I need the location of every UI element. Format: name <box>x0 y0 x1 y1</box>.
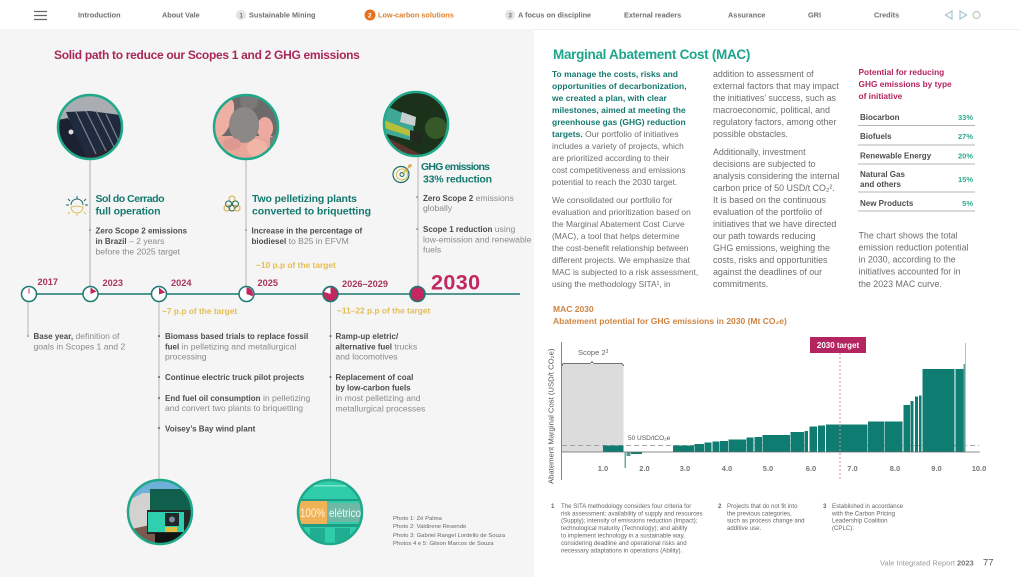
footnote 3: 3 <box>823 503 827 510</box>
milestone: GHG emissions 33% reduction: fuels <box>423 244 441 254</box>
navigation bar: 2 <box>368 12 372 20</box>
timeline <box>22 270 520 302</box>
x axis labels: 5.0 <box>763 464 773 473</box>
navigation bar: About Vale <box>162 10 200 20</box>
text column 2: addition to assessment of <box>713 69 814 79</box>
footnote 3: with the Carbon Pricing <box>831 510 895 518</box>
text column 1: potential to reach the 2030 target. <box>552 177 677 187</box>
timeline: 2017 <box>38 277 58 287</box>
photo: 100% electric sign: elétrico <box>329 506 361 520</box>
text column 1: To manage the costs, risks and <box>552 69 678 79</box>
text column 1: MAC is subjected to a risk assessment, <box>552 267 698 277</box>
photo: solar panels <box>59 96 121 158</box>
marker: 2017 <box>22 286 36 302</box>
text column 1: We consolidated our portfolio for <box>552 195 673 205</box>
dashed 50 USD line <box>562 444 979 446</box>
y axis title: Abatement Marginal Cost (USD/t CO₂e) <box>546 348 556 484</box>
footnote 3: Leadership Coalition <box>832 518 888 524</box>
text column 1: different projects. We emphasize that <box>552 255 691 265</box>
milestone: 2026-2029 actions: metallurgical processes <box>336 404 425 414</box>
text column 2: our path towards reducing <box>713 231 816 241</box>
icon: pellets triangle <box>224 196 240 211</box>
milestone: GHG emissions 33% reduction <box>416 161 532 254</box>
panel: potential by initiative: 33% <box>958 113 973 122</box>
text column 2: the initiatives’ success, such as <box>713 93 837 103</box>
milestone: Sol do Cerrado: in Brazil – 2 years <box>96 236 164 246</box>
text column 2 <box>713 69 839 289</box>
milestone: GHG emissions 33% reduction: Scope 1 reduction using <box>423 224 516 234</box>
timeline: 2023 <box>102 278 123 288</box>
footnote 1: to implement technology in a sustainable way, <box>561 532 685 540</box>
timeline: 2024 <box>171 278 192 288</box>
panel: potential by initiative: Biofuels <box>860 132 892 141</box>
photo credits: Photo 2: Valdirene Resende <box>393 524 467 530</box>
x axis labels: 2.0 <box>639 464 650 473</box>
teal bars <box>603 364 965 468</box>
footnote 2: such as process change and <box>727 518 805 524</box>
navigation bar <box>34 10 980 20</box>
text column 1: (MAC), a tool that helps determine <box>552 231 680 241</box>
milestone: base year <box>27 331 125 352</box>
chart title: Abatement potential for GHG emissions in 2030 (Mt CO₂e) <box>553 316 787 326</box>
2030 target line <box>839 353 841 480</box>
text column 1: milestones, aimed at meeting the <box>552 105 686 115</box>
navigation bar: 3 <box>508 14 512 20</box>
milestone: pelletizing plants: Two pelletizing plants <box>252 193 357 205</box>
timeline: 2030 <box>431 270 480 294</box>
panel: potential by initiative: 27% <box>958 132 973 141</box>
milestone: 2026-2029 actions: by low-carbon fuels <box>336 384 411 392</box>
2030 target label <box>810 337 866 353</box>
text: chart note: in 2030, according to the <box>858 254 956 264</box>
milestone: GHG emissions 33% reduction: globally <box>423 203 453 213</box>
milestone: GHG emissions 33% reduction: 33% reduction <box>423 174 492 186</box>
timeline: 2026–2029 <box>342 279 388 289</box>
x axis labels: 7.0 <box>847 464 858 473</box>
left page background <box>0 29 534 577</box>
x axis labels: 6.0 <box>806 464 816 473</box>
panel: potential by initiative: 20% <box>958 152 973 160</box>
text column 1: the Marginal Abatement Cost Curve <box>552 219 685 229</box>
connector lines <box>28 155 418 480</box>
milestone: 2026-2029 actions: Replacement of coal <box>336 373 413 382</box>
milestone: 2024 actions: processing <box>165 352 207 362</box>
photo: pellets in hand <box>215 96 277 158</box>
chart: MAC curve <box>546 337 986 484</box>
text column 1: evaluation and prioritization based on <box>552 207 691 217</box>
milestone: Sol do Cerrado: full operation <box>96 206 160 218</box>
milestone: GHG emissions 33% reduction: GHG emissions <box>421 161 490 173</box>
milestone: pelletizing plants: biodiesel to B25 in EFVM <box>252 236 349 246</box>
target note: 7 p.p: ~7 p.p of the target <box>162 306 237 316</box>
footnote 2 <box>718 503 805 532</box>
milestone: 2026-2029 actions <box>330 332 425 414</box>
panel: potential by initiative <box>858 67 975 211</box>
text column 2: commitments. <box>713 279 768 289</box>
title: solid path: Solid path to reduce our Scopes 1 and 2 GHG emissions <box>54 48 360 62</box>
text column 1: we created a plan, with clear <box>551 93 667 103</box>
text column 2: GHG emissions, weighing the <box>713 243 830 253</box>
footnote 2: additive use. <box>727 525 762 532</box>
photo: 100% electric sign: 100% <box>300 506 325 520</box>
footnote 1: risk assessment: availability of supply and resources <box>561 510 703 518</box>
text column 1: are prioritized according to their <box>552 153 670 163</box>
text: chart note: initiatives accounted for in <box>858 266 961 276</box>
timeline: 2025 <box>258 278 278 288</box>
footnote 1: 1 <box>551 503 555 510</box>
milestone: pelletizing plants: Increase in the percentage of <box>252 226 363 236</box>
icon: target <box>393 164 412 182</box>
panel: potential by initiative: Natural Gas <box>860 170 905 179</box>
icon: previous and next arrows <box>946 11 966 19</box>
text column 2: It is based on the continuous <box>713 195 827 205</box>
text column 1: greenhouse gas (GHG) reduction <box>552 117 686 127</box>
milestone: 2026-2029 actions: in most pelletizing and <box>336 393 421 403</box>
panel: potential by initiative: Potential for reducing <box>858 67 944 77</box>
text: chart note <box>858 230 969 289</box>
text column 2: external factors that may impact <box>713 81 839 91</box>
navigation bar: External readers <box>624 10 681 20</box>
x axis labels: 4.0 <box>722 464 732 473</box>
footnote 3: (CPLC). <box>832 525 854 532</box>
x axis labels: 9.0 <box>931 464 942 473</box>
icon: menu <box>34 12 47 20</box>
milestone: GHG emissions 33% reduction: Zero Scope 2 emissions <box>423 193 514 203</box>
photo credits: Photos 4 e 5: Gilson Marcos de Souza <box>393 541 494 547</box>
milestone: pelletizing plants: converted to briquetting <box>252 206 371 218</box>
milestone: 2024 actions <box>159 332 310 434</box>
footnote 1: necessary adaptations in operations (Ability). <box>561 548 683 554</box>
milestone: base year: goals in Scopes 1 and 2 <box>34 342 125 352</box>
milestone: Sol do Cerrado: Sol do Cerrado <box>96 193 164 205</box>
footnote 1: technological maturity (Technology); and ability <box>561 525 688 532</box>
page footer: 77 <box>983 558 994 568</box>
text column 2: carbon price of 50 USD/t CO₂². <box>713 183 835 193</box>
text: chart note: the 2023 MAC curve. <box>858 279 942 289</box>
photo: locomotive <box>385 93 447 155</box>
x axis labels: 1.0 <box>598 464 608 473</box>
icon: back <box>973 12 980 18</box>
Scope 2 block: Scope 2 <box>578 348 606 357</box>
text column 1: opportunities of decarbonization, <box>552 81 687 91</box>
text column 2: analysis considering the internal <box>713 171 839 181</box>
milestone: 2024 actions: Biomass based trials to replace fossil <box>165 332 308 341</box>
navigation bar: Assurance <box>728 10 765 20</box>
milestone: pelletizing plants <box>245 193 371 246</box>
photo: 100% electric sign <box>299 481 361 543</box>
milestone: GHG emissions 33% reduction: low-emission and renewable <box>423 234 532 244</box>
footnote 2: the previous categories, <box>727 510 792 518</box>
panel: potential by initiative: Biocarbon <box>860 113 900 122</box>
text column 2: against the deadlines of our <box>713 267 822 277</box>
navigation bar: Introduction <box>78 10 121 20</box>
page footer: Vale Integrated Report 2023 <box>880 558 974 568</box>
photo credits <box>393 516 506 547</box>
milestone: Sol do Cerrado: Zero Scope 2 emissions <box>96 226 188 236</box>
icon: sun <box>66 196 88 216</box>
axes <box>560 342 562 480</box>
milestone: 2024 actions: and convert two plants to briquetting <box>165 403 303 413</box>
photo credits: Photo 1: Zé Palma <box>393 516 443 522</box>
marker: 2023 <box>83 286 98 302</box>
chart title <box>553 304 787 326</box>
milestone: 2026-2029 actions: and locomotives <box>336 352 398 362</box>
marker: 2025 <box>239 286 254 302</box>
navigation bar: Sustainable Mining <box>249 10 316 20</box>
text column 2: costs, risks and opportunities <box>713 255 828 265</box>
x axis labels: 3.0 <box>680 464 690 473</box>
footnote 1: The SITA methodology considers four criteria for <box>561 503 691 510</box>
chart: MAC curve: 50 USD/tCO₂e <box>628 435 671 442</box>
footnote 1: considering deadline and operational risks and <box>561 540 687 547</box>
footnote 2: 2 <box>718 503 722 510</box>
text column 2: Additionally, investment <box>713 147 806 157</box>
target note: 11-22 p.p: ~11–22 p.p of the target <box>337 306 431 316</box>
Scope 2 block <box>562 348 624 452</box>
navigation bar: GRI <box>808 10 821 20</box>
text column 2: regulatory factors, among other <box>713 117 836 127</box>
text column 2: evaluation of the portfolio of <box>713 207 823 217</box>
text column 1: includes a variety of projects, which <box>552 141 684 151</box>
photo credits: Photo 3: Gabriel Rangel Lordello de Souza <box>393 533 506 539</box>
text column 1: targets. Our portfolio of initiatives <box>552 129 679 139</box>
footnote 1: (Supply); intensity of emissions reduction (Impact); <box>561 518 698 524</box>
navigation bar: A focus on discipline <box>518 10 591 20</box>
navigation bar: Low-carbon solutions <box>378 10 454 20</box>
text column 2: initiatives that we have directed <box>713 219 836 229</box>
text column 1 <box>551 69 698 289</box>
panel: potential by initiative: and others <box>860 180 901 189</box>
text column 2: macroeconomic, political, and <box>713 105 830 115</box>
milestone: 2026-2029 actions: alternative fuel trucks <box>336 342 417 352</box>
2030 target label: 2030 target <box>817 341 859 350</box>
milestone: base year: Base year, definition of <box>34 331 120 341</box>
navigation bar: Credits <box>874 10 899 20</box>
page footer <box>880 558 994 568</box>
milestone: 2024 actions: Voisey’s Bay wind plant <box>165 424 256 434</box>
panel: potential by initiative: New Products <box>860 199 914 208</box>
marker: 2026-2029 <box>323 286 338 302</box>
footnote 2: Projects that do not fit into <box>727 503 798 510</box>
marker: 2030 <box>410 286 425 302</box>
panel: potential by initiative: Renewable Energy <box>860 152 932 160</box>
milestone: 2026-2029 actions: Ramp-up eletric/ <box>336 332 399 341</box>
milestone: Sol do Cerrado <box>89 193 188 256</box>
x axis labels <box>598 464 986 473</box>
x axis labels: 10.0 <box>972 464 986 473</box>
milestone: Sol do Cerrado: before the 2025 target <box>96 246 181 256</box>
text column 2: decisions are subjected to <box>713 159 816 169</box>
footnote 3: Established in accordance <box>832 503 904 510</box>
x axis labels: 8.0 <box>890 464 900 473</box>
Scope 2 block: 3 <box>606 349 609 355</box>
milestone: 2024 actions: Continue electric truck pilot projects <box>165 373 305 382</box>
photo rings <box>58 92 448 544</box>
chart title: MAC 2030 <box>553 304 594 314</box>
milestone: 2024 actions: fuel in pelletizing and metallurgical <box>165 342 296 352</box>
text: chart note: emission reduction potential <box>858 242 969 252</box>
target note: 10 p.p: ~10 p.p of the target <box>256 260 336 270</box>
panel: potential by initiative: 5% <box>962 199 973 208</box>
text column 2: possible obstacles. <box>713 129 788 139</box>
panel: potential by initiative: GHG emissions by type <box>858 79 952 89</box>
panel: potential by initiative: of initiative <box>858 91 903 101</box>
text: chart note: The chart shows the total <box>858 230 958 240</box>
text column 1: using the methodology SITA¹, in <box>552 279 671 289</box>
footnote 3 <box>823 503 904 532</box>
text column 1: cost competitiveness and emissions <box>552 165 686 175</box>
navigation bar: 1 <box>240 14 244 20</box>
text column 1: the cost-benefit relationship between <box>552 243 689 253</box>
heading: Marginal Abatement Cost: Marginal Abatement Cost (MAC) <box>553 47 750 62</box>
milestone: 2024 actions: End fuel oil consumption in pelletizing <box>165 393 310 403</box>
marker: 2024 <box>152 286 166 302</box>
footnote 1 <box>551 503 703 554</box>
panel: potential by initiative: 15% <box>958 175 973 184</box>
photo: electric truck <box>129 481 191 543</box>
